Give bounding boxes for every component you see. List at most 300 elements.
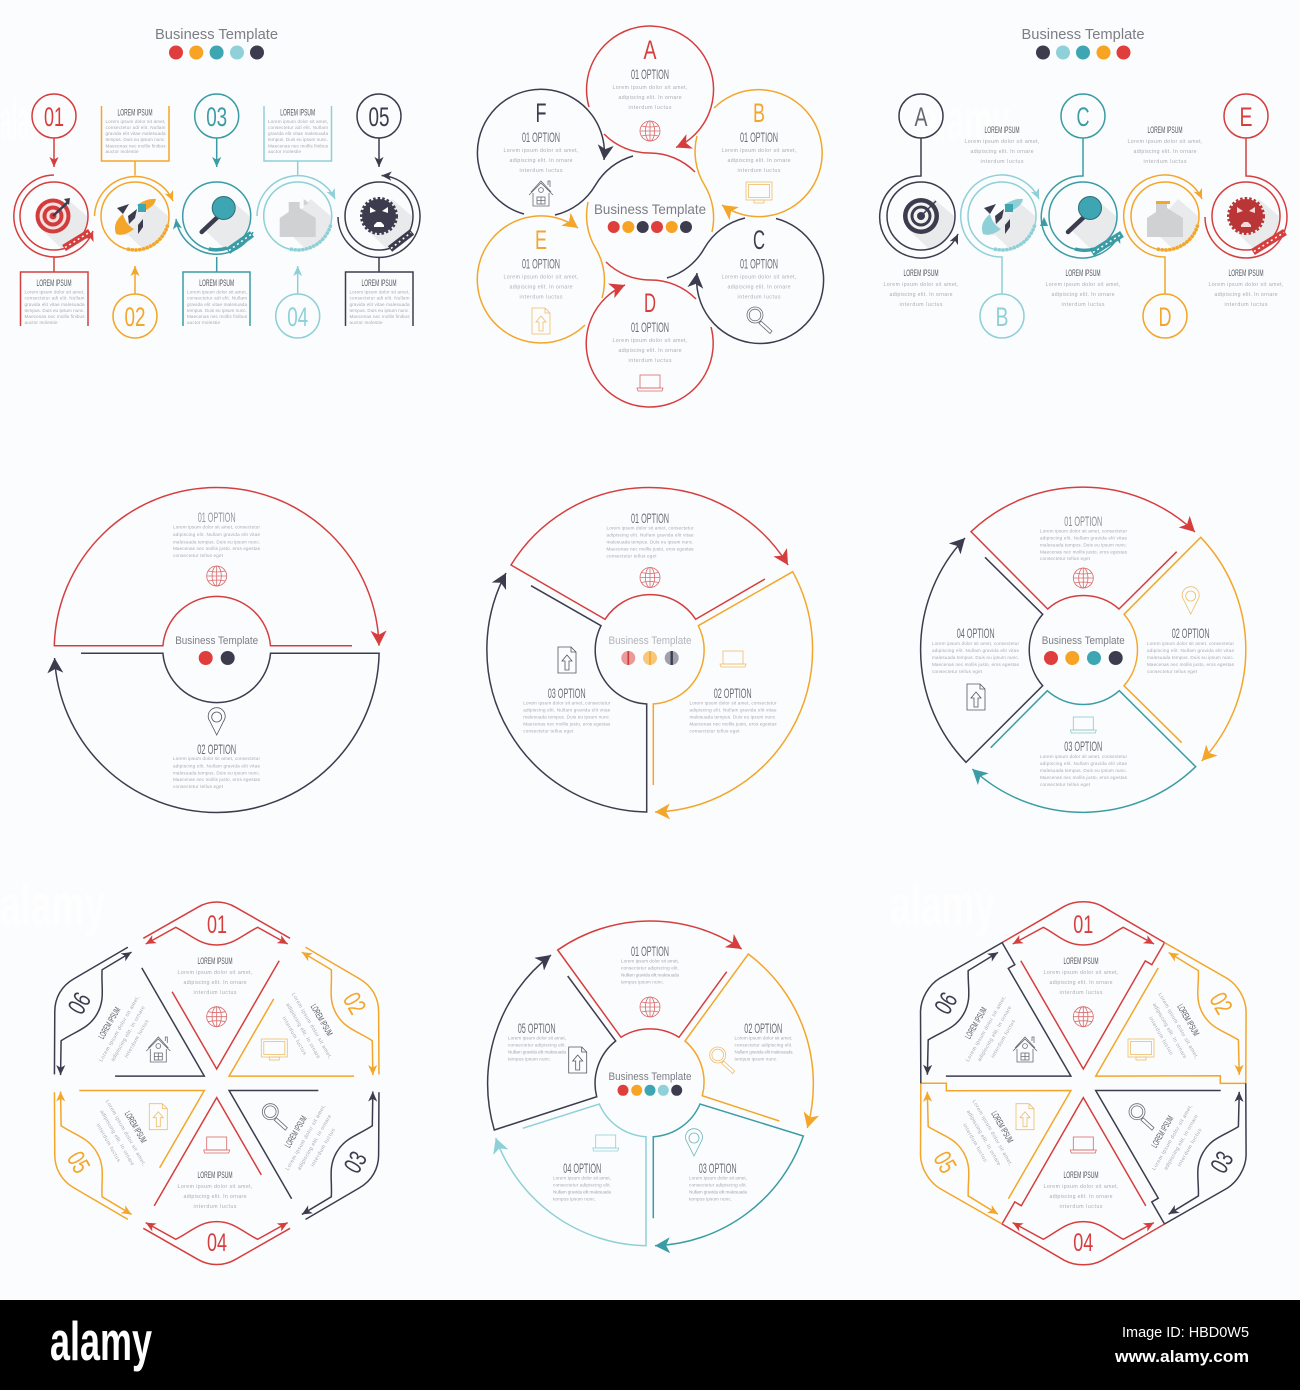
option 05 text [508, 1020, 566, 1062]
circle C text: 01 OPTION [740, 256, 778, 272]
option 01 text: Nullam gravida elit malesuada [621, 972, 679, 978]
text 01 [178, 956, 252, 996]
circle B text: adipiscing elit. In ornare [728, 158, 791, 164]
text 01: LOREM IPSUM [1064, 956, 1098, 966]
lorem text 03: auctor molestie [187, 320, 220, 325]
text 02: Lorem ipsum dolor sit amet, [290, 992, 333, 1060]
wedge 03 [192, 1027, 410, 1237]
wedge 04 [1002, 1098, 1165, 1265]
option 02 text: consectetur tellus eget [173, 784, 224, 789]
option 01 text: adipiscing elit. Nullam gravida elit vitae [1040, 536, 1127, 540]
wedge 06 [885, 922, 1112, 1147]
step 01: 01 [44, 102, 64, 132]
wedge 01 [143, 902, 290, 1069]
option 01 text: Lorem ipsum dolor sit amet, consectetur [1040, 528, 1127, 534]
step E: E [1240, 102, 1252, 132]
option 04 text: adipiscing elit. Nullam gravida elit vitae [932, 648, 1019, 653]
lorem text 05: LOREM IPSUM [362, 278, 396, 288]
text 06: interdum luctus [990, 1019, 1017, 1059]
panel: hexagon left [23, 902, 410, 1265]
circle B text: interdum luctus [738, 168, 781, 174]
circle F text [504, 129, 578, 174]
option 01 text: consectetur adipiscing elit. [621, 966, 679, 970]
lorem text 03: consectetur adi elit. Nullam [187, 296, 247, 300]
option 03 text: Lorem ipsum dolor sit amet, consectetur [1040, 754, 1127, 759]
text 05: Lorem ipsum dolor sit amet, [971, 1099, 1013, 1167]
footer bar [0, 1300, 1300, 1390]
segment 02 outline [55, 653, 379, 812]
circle B text: Lorem ipsum dolor sit amet, [722, 148, 796, 154]
text 04: interdum luctus [194, 1204, 237, 1210]
text 06 [953, 988, 1025, 1073]
circle C text: Lorem ipsum dolor sit amet, [722, 274, 796, 280]
option 04 text: consectetur adipiscing elit. [553, 1182, 611, 1188]
text 01: LOREM IPSUM [198, 956, 232, 966]
option 05 text: consectetur adipiscing elit. [508, 1042, 566, 1048]
option 02 text: Maecenas nec mollis justo, eros egestas [690, 722, 777, 726]
text 02: adipiscing elit. In ornare [1151, 1002, 1188, 1060]
circle D text: interdum luctus [628, 358, 672, 364]
circle D: D [644, 288, 656, 318]
icon: envelope [1147, 199, 1198, 249]
segment 03 outline [972, 691, 1196, 812]
icon: document [558, 647, 576, 673]
text E [1208, 268, 1284, 308]
option 04 text: consectetur tellus eget [932, 669, 983, 674]
lorem text 02: auctor molestie [106, 149, 139, 154]
circle C text: interdum luctus [738, 294, 781, 300]
colour dots [1036, 46, 1130, 60]
option 01 text: 01 OPTION [631, 943, 669, 959]
lorem text 02: tempus. Duis eu ipsum nunc. [106, 137, 166, 142]
numbers: 03 [1205, 1147, 1239, 1178]
option 03 text: consectetur tellus eget [523, 728, 574, 734]
option 01 text [606, 510, 694, 558]
lorem text 05: gravida elit vitae malesuada [350, 302, 410, 307]
option 02 text [1147, 625, 1235, 674]
text C [1046, 268, 1120, 308]
icon: magnifier [710, 1047, 735, 1074]
wedge 04 [143, 1098, 290, 1265]
icon: laptop [720, 651, 746, 667]
option 01 text: consectetur tellus eget [606, 554, 657, 558]
lorem text 05: consectetur adi elit. Nullam [350, 296, 410, 300]
circle E text: Lorem ipsum dolor sit amet, [504, 274, 578, 280]
icons [1013, 1007, 1154, 1153]
text 02: interdum luctus [1147, 1016, 1174, 1056]
segment 02 outline [653, 572, 813, 812]
step D: D [1158, 302, 1172, 332]
centre dots [1044, 651, 1123, 665]
option 04 text: Maecenas nec mollis justo, eros egestas [932, 662, 1020, 667]
icon: rocket [982, 198, 1035, 249]
option 03 text: malesuada tempus. Duis eu ipsum nunc. [523, 714, 610, 720]
centre dots [199, 651, 235, 665]
icon: globe [640, 568, 660, 588]
circle C [667, 218, 824, 343]
colour dots [169, 46, 264, 60]
step E [1205, 94, 1287, 258]
segment 01 outline [511, 487, 788, 619]
lorem text 03 [187, 278, 248, 325]
text 03: Lorem ipsum dolor sit amet, [1151, 1104, 1194, 1172]
circle E: E [535, 225, 547, 255]
step 02 [94, 106, 173, 338]
option 02 text: consectetur adipiscing elit. [734, 1042, 792, 1048]
lorem text 01: tempus. Duis eu ipsum nunc. [24, 308, 84, 313]
option 03 text [1040, 738, 1128, 787]
option 01 text: Lorem ipsum dolor sit amet, consectetur [606, 526, 694, 530]
text 05: adipiscing elit. In ornare [98, 1109, 135, 1167]
text 05: interdum luctus [961, 1123, 988, 1163]
circle D text: 01 OPTION [631, 319, 669, 335]
text B: Lorem ipsum dolor sit amet, [964, 139, 1040, 145]
option 02 text: consectetur tellus eget [1147, 669, 1198, 674]
segment 04 outline [496, 1104, 646, 1246]
text 05: adipiscing elit. In ornare [965, 1109, 1002, 1167]
option 02 text: 02 OPTION [197, 741, 236, 757]
option 02 text: Maecenas nec mollis justo, eros egestas [173, 777, 261, 782]
panel: three-part wheel [487, 487, 813, 812]
step D [1124, 175, 1202, 338]
numbers: 04 [1073, 1229, 1093, 1257]
text 06: interdum luctus [124, 1019, 151, 1059]
text 03: interdum luctus [1177, 1127, 1204, 1168]
lorem text 02: LOREM IPSUM [118, 108, 152, 118]
icon: pin [208, 708, 225, 735]
panel: four-part wheel [921, 487, 1246, 812]
text 06: adipiscing elit. In ornare [977, 1005, 1013, 1063]
numbers: 01 [207, 911, 227, 939]
centre dots [608, 221, 692, 233]
option 01 text [1040, 513, 1128, 561]
option 02 text: adipiscing elit. Nullam gravida elit vitae [1147, 648, 1234, 653]
segment 01 outline [54, 488, 379, 646]
lorem text 01: Lorem ipsum dolor sit amet, [24, 290, 84, 294]
text 01: adipiscing elit. In ornare [1050, 980, 1113, 986]
circle A: A [644, 35, 656, 65]
circle A text: adipiscing elit. In ornare [618, 95, 682, 101]
option 01 text: Maecenas nec mollis justo, eros egestas [606, 546, 694, 552]
text 02 [273, 985, 345, 1070]
text 05 [953, 1092, 1025, 1177]
option 01 text [173, 509, 261, 558]
numbers: 05 [928, 1147, 962, 1178]
lorem text 03: tempus. Duis eu ipsum nunc. [187, 308, 247, 313]
lorem text 05: tempus. Duis eu ipsum nunc. [350, 308, 410, 313]
option 03 text: consectetur tellus eget [1040, 782, 1091, 787]
lorem text 02: Lorem ipsum dolor sit amet, [106, 119, 166, 124]
panel: two-part wheel [54, 488, 379, 812]
text 01: Lorem ipsum dolor sit amet, [178, 970, 252, 976]
text C: adipiscing elit. In ornare [1052, 292, 1115, 298]
option 01 text: malesuada tempus. Duis eu ipsum nunc. [606, 540, 694, 544]
text E: Lorem ipsum dolor sit amet, [1208, 282, 1284, 288]
option 03 text: 03 OPTION [699, 1160, 737, 1176]
icon: globe [640, 997, 660, 1017]
option 05 text: 05 OPTION [518, 1020, 556, 1036]
option 03 text: adipiscing elit. Nullam gravida elit vitae [1040, 761, 1127, 766]
option 02 text: Lorem ipsum dolor sit amet, consectetur [690, 700, 777, 706]
text 04 [1044, 1170, 1118, 1210]
option 04 text [553, 1160, 611, 1202]
option 02 text: 02 OPTION [1172, 625, 1210, 641]
icon: laptop [637, 375, 663, 391]
centre title: Business Template [1042, 635, 1125, 647]
circle E text: 01 OPTION [522, 256, 560, 272]
text 04: Lorem ipsum dolor sit amet, [178, 1184, 252, 1190]
circle A [587, 26, 714, 172]
option 02 text [734, 1020, 793, 1062]
option 01 text: malesuada tempus. Duis eu ipsum nunc. [173, 540, 260, 544]
icon: globe [1073, 568, 1093, 588]
icon: document [967, 684, 985, 710]
option 02 text: 02 OPTION [744, 1020, 782, 1036]
option 01 text: consectetur tellus eget [173, 553, 224, 558]
circle A text [612, 66, 688, 111]
text 02: Lorem ipsum dolor sit amet, [1157, 992, 1199, 1060]
watermark wash: alamy [890, 873, 995, 938]
lorem text 04: Maecenas nec mollis finibus [268, 144, 329, 148]
text 06: Lorem ipsum dolor sit amet, [965, 995, 1008, 1063]
option 04 text: Lorem ipsum dolor sit amet, [553, 1176, 611, 1180]
watermark wash: alamy [0, 88, 60, 153]
text 04: Lorem ipsum dolor sit amet, [1044, 1184, 1118, 1190]
option 04 text: tempus ipsum nunc. [553, 1196, 596, 1202]
watermark wash [0, 88, 1010, 938]
numbers: 01 [1073, 911, 1093, 939]
segment 02 outline [1124, 537, 1246, 761]
text 06: adipiscing elit. In ornare [110, 1005, 147, 1063]
option 03 text [689, 1160, 747, 1202]
circle E text: interdum luctus [520, 294, 563, 300]
option 02 text: tempus ipsum nunc. [734, 1056, 778, 1062]
icon: globe [640, 121, 660, 141]
option 02 text: Lorem ipsum dolor sit amet, [734, 1036, 792, 1040]
wedge 05 [885, 1020, 1112, 1244]
wedge 05 [23, 1027, 241, 1237]
text 02: interdum luctus [281, 1016, 308, 1056]
lorem text 02: gravida elit vitae malesuada [106, 131, 166, 136]
lorem text 03: LOREM IPSUM [199, 278, 234, 288]
option 02 text: adipiscing elit. Nullam gravida elit vitae [690, 708, 777, 712]
option 02 text: adipiscing elit. Nullam gravida elit vitae [173, 764, 260, 768]
panel: hexagon right [885, 902, 1281, 1265]
option 03 text [523, 685, 611, 734]
circle F text: Lorem ipsum dolor sit amet, [504, 148, 578, 154]
step A [880, 94, 958, 258]
segment 03 outline [653, 1104, 803, 1246]
circle D text [612, 319, 688, 364]
text A: LOREM IPSUM [904, 268, 938, 278]
text C: LOREM IPSUM [1066, 268, 1100, 278]
icon: pin [686, 1129, 702, 1156]
text 01: adipiscing elit. In ornare [184, 980, 247, 986]
circle E [477, 202, 604, 343]
option 03 text: malesuada tempus. Duis eu ipsum nunc. [1040, 768, 1127, 773]
option 02 text: Maecenas nec mollis justo, eros egestas [1147, 662, 1235, 667]
text D: adipiscing elit. In ornare [1134, 149, 1197, 155]
lorem text 05: Lorem ipsum dolor sit amet, [350, 290, 410, 294]
icon: laptop [1070, 717, 1096, 733]
text 04: LOREM IPSUM [198, 1170, 232, 1180]
lorem text 05: auctor molestie [350, 320, 383, 325]
text B: interdum luctus [980, 159, 1024, 165]
icon: document [532, 308, 550, 334]
text 06: LOREM IPSUM [963, 1005, 989, 1041]
segment 02 outline [685, 954, 813, 1128]
lorem text 01 [24, 278, 85, 325]
option 03 text: Nullam gravida elit malesuada [689, 1190, 747, 1194]
text 02 [1139, 985, 1211, 1070]
text 06 [86, 988, 158, 1073]
option 02 text: malesuada tempus. Duis eu ipsum nunc. [173, 770, 260, 776]
icon: magnifier [202, 196, 250, 249]
heading: Business Template: Business Template [155, 26, 278, 43]
text 05: interdum luctus [95, 1123, 122, 1163]
lorem text 01: gravida elit vitae malesuada [24, 302, 85, 307]
step C: C [1076, 102, 1090, 132]
text C: Lorem ipsum dolor sit amet, [1046, 282, 1120, 288]
text 01: Lorem ipsum dolor sit amet, [1044, 970, 1118, 976]
numbers: 05 [61, 1147, 95, 1178]
text 04: adipiscing elit. In ornare [184, 1194, 247, 1200]
circle E text [504, 256, 578, 300]
text 04: LOREM IPSUM [1064, 1170, 1098, 1180]
lorem text 04: tempus. Duis eu ipsum nunc. [268, 137, 328, 142]
option 04 text: malesuada tempus. Duis eu ipsum nunc. [932, 655, 1019, 660]
text 03 [1139, 1097, 1211, 1182]
option 02 text [173, 741, 261, 789]
icon: pin [1182, 587, 1199, 614]
option 02 text [690, 685, 777, 734]
lorem text 03: Maecenas nec mollis finibus [187, 314, 248, 319]
option 02 text: malesuada tempus. Duis eu ipsum nunc. [1147, 655, 1234, 660]
numbers: 03 [339, 1147, 373, 1178]
option 01 text: adipiscing elit. Nullam gravida elit vitae [606, 532, 694, 538]
text 01: interdum luctus [194, 990, 237, 996]
panel: six circles A-F [477, 26, 824, 407]
lorem text 01: LOREM IPSUM [36, 278, 72, 288]
numbers [928, 911, 1239, 1257]
option 02 text: Nullam gravida elit malesuada [734, 1050, 793, 1054]
panel: lettered timeline A-E [880, 26, 1287, 338]
option 04 text: 04 OPTION [957, 625, 995, 641]
circle F: F [536, 98, 546, 128]
step B: B [996, 302, 1008, 332]
text 04: interdum luctus [1060, 1204, 1103, 1210]
option 02 text: malesuada tempus. Duis eu ipsum nunc. [690, 714, 776, 720]
option 01 text [621, 943, 679, 984]
circle F text: adipiscing elit. In ornare [510, 158, 573, 164]
option 01 text: tempus ipsum nunc. [621, 980, 664, 984]
option 05 text: Lorem ipsum dolor sit amet, [508, 1036, 566, 1040]
panel: five-part wheel [488, 921, 813, 1246]
option 03 text: Lorem ipsum dolor sit amet, [689, 1176, 747, 1180]
segment 03 outline [487, 573, 647, 812]
option 02 text: consectetur tellus eget [690, 728, 740, 734]
wedge 01 [1002, 902, 1165, 1069]
lorem text 04: LOREM IPSUM [280, 108, 315, 118]
icon: target [903, 198, 954, 249]
option 01 text: 01 OPTION [198, 509, 236, 525]
text 03: Lorem ipsum dolor sit amet, [285, 1104, 327, 1172]
text 01 [1044, 956, 1118, 996]
option 03 text: 03 OPTION [1064, 738, 1102, 754]
lorem text 04: auctor molestie [268, 149, 301, 154]
heading: Business Template: Business Template [1022, 26, 1144, 43]
icon: magnifier [1068, 196, 1116, 249]
centre dots [621, 651, 679, 665]
circle E text: adipiscing elit. In ornare [510, 284, 573, 290]
step 03 [176, 94, 253, 326]
centre dots [618, 1085, 682, 1096]
text 05: Lorem ipsum dolor sit amet, [104, 1099, 147, 1167]
text 02: adipiscing elit. In ornare [284, 1002, 321, 1060]
step 04: 04 [287, 302, 308, 332]
numbers: 06 [63, 988, 97, 1019]
text 05: LOREM IPSUM [123, 1109, 149, 1145]
website: www.alamy.com [1114, 1347, 1249, 1366]
option 01 text: Lorem ipsum dolor sit amet, consectetur [173, 524, 260, 530]
text E: interdum luctus [1224, 302, 1268, 308]
text 03: adipiscing elit. In ornare [1163, 1114, 1200, 1171]
icon: monitor [746, 182, 772, 203]
text 03: LOREM IPSUM [283, 1114, 309, 1149]
icons [146, 1007, 287, 1153]
option 04 text [932, 625, 1020, 674]
centre title: Business Template [594, 201, 706, 217]
circle B: B [753, 98, 765, 128]
text A [884, 268, 958, 308]
option 03 text: tempus ipsum nunc. [689, 1196, 732, 1202]
text D [1128, 125, 1202, 165]
text D: Lorem ipsum dolor sit amet, [1128, 139, 1202, 145]
watermark wash: alamy [0, 873, 105, 938]
option 04 text: 04 OPTION [563, 1160, 601, 1176]
lorem text 01: auctor molestie [24, 320, 58, 325]
option 01 text: malesuada tempus. Duis eu ipsum nunc. [1040, 542, 1127, 548]
text C: interdum luctus [1062, 302, 1105, 308]
lorem text 04: consectetur adi elit. Nullam [268, 125, 328, 130]
icon: gear face [1228, 198, 1279, 249]
text 01: interdum luctus [1060, 990, 1103, 996]
watermark wash: alamy [920, 88, 1010, 153]
icon: document [569, 1047, 587, 1073]
step 05: 05 [368, 102, 390, 132]
text 04 [178, 1170, 252, 1210]
circle F text: interdum luctus [520, 168, 563, 174]
text A: Lorem ipsum dolor sit amet, [884, 282, 958, 288]
text D: LOREM IPSUM [1148, 125, 1182, 135]
circle C: C [753, 225, 765, 255]
wedge 02 [192, 929, 410, 1140]
step 03: 03 [206, 102, 227, 132]
circle D [586, 262, 713, 407]
icon: rocket [115, 198, 168, 249]
option 01 text: 01 OPTION [1064, 513, 1102, 529]
lorem text 02 [106, 108, 166, 154]
lorem text 05: Maecenas nec mollis finibus [350, 314, 410, 319]
wedge 03 [1055, 1020, 1281, 1244]
step A: A [914, 102, 928, 132]
text 06: LOREM IPSUM [96, 1005, 122, 1041]
text E: LOREM IPSUM [1228, 268, 1264, 278]
text 03: LOREM IPSUM [1149, 1114, 1175, 1149]
step 04 [257, 106, 335, 338]
wedge 06 [23, 929, 241, 1140]
circle F [477, 89, 633, 215]
